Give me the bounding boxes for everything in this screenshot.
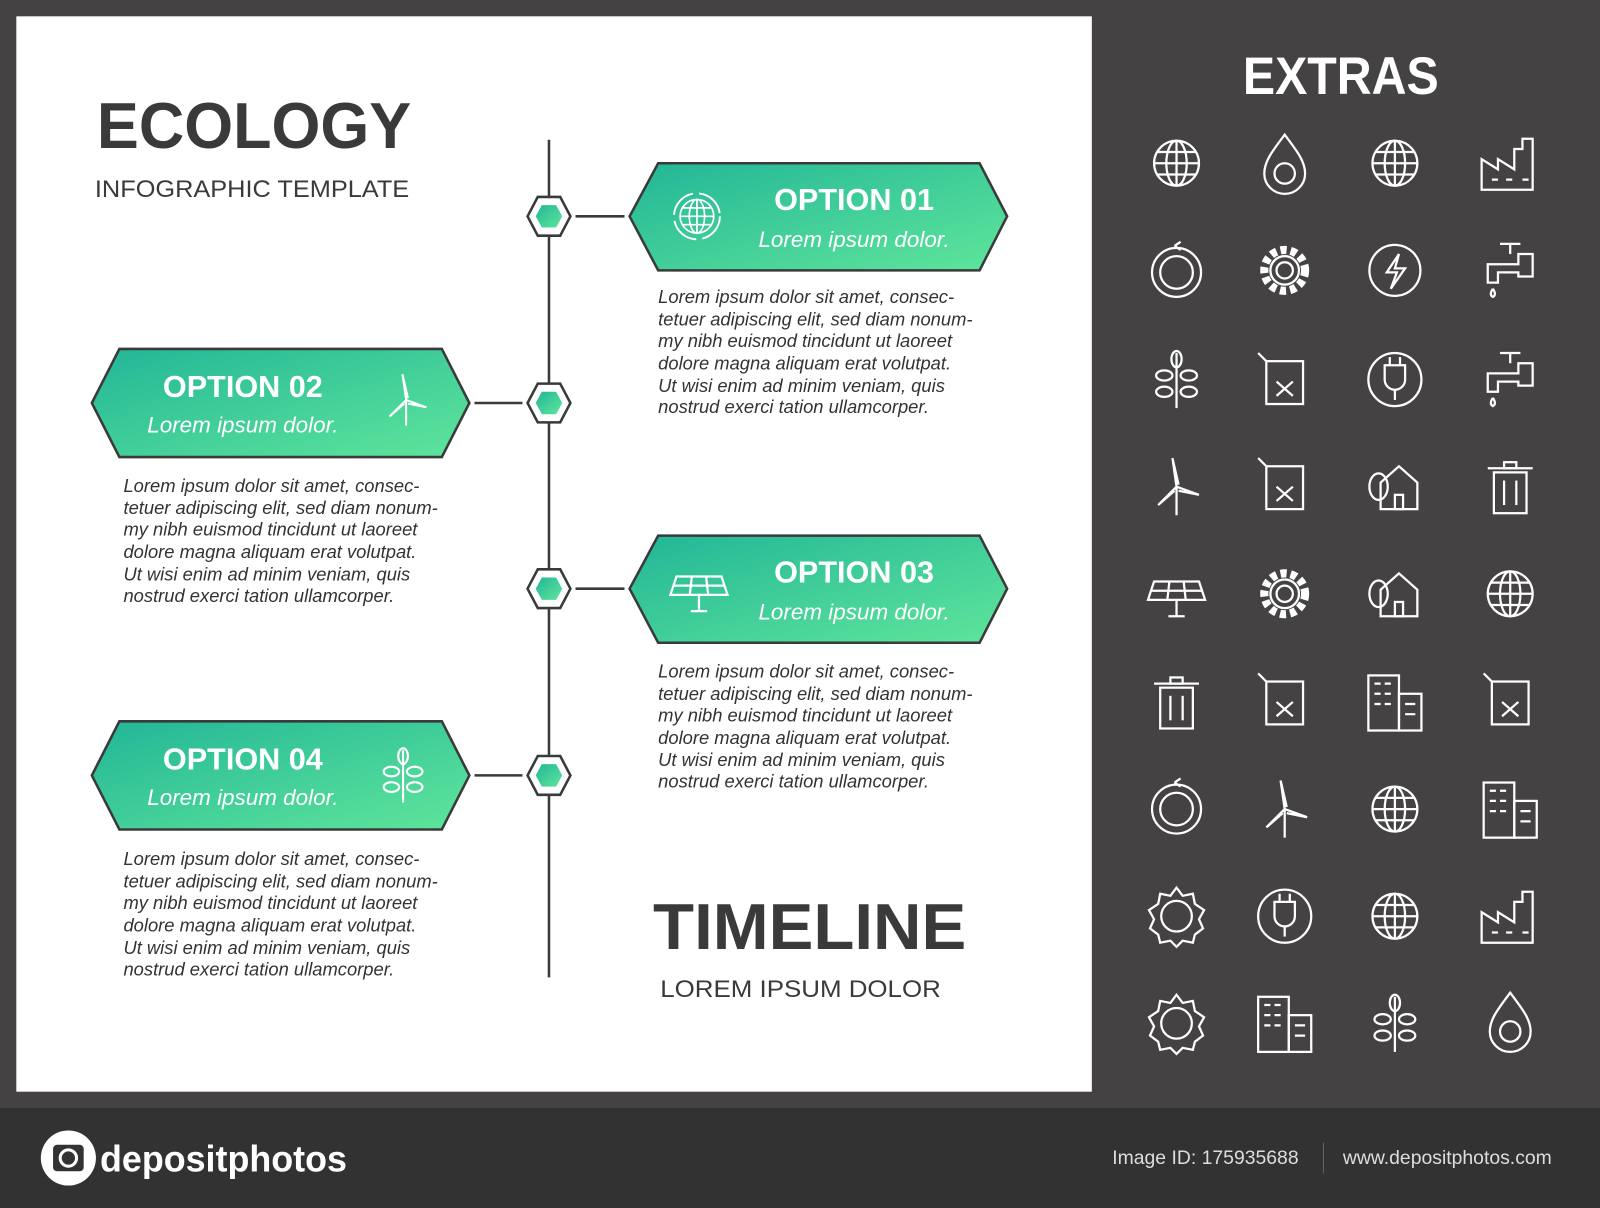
text: option 02 (123, 475, 438, 606)
timeline line (548, 140, 550, 977)
timeline heading (653, 890, 966, 1003)
text: option 02: Lorem ipsum dolor sit amet, consec- (123, 475, 419, 496)
text: option 04: nostrud exerci tation ullamcorper. (123, 958, 394, 979)
text: option 04: dolore magna aliquam erat volutpat. (123, 915, 416, 936)
option 04: Lorem ipsum dolor. (147, 785, 338, 810)
text: option 01: dolore magna aliquam erat volutpat. (658, 352, 951, 373)
footer bar (0, 1108, 1600, 1208)
white panel (16, 16, 1092, 1092)
text: option 01: Lorem ipsum dolor sit amet, consec- (658, 286, 954, 307)
title (95, 89, 411, 203)
extras icon grid (1148, 135, 1537, 1054)
text: option 04 (123, 848, 438, 979)
text: option 04: Lorem ipsum dolor sit amet, consec- (123, 848, 419, 869)
text: option 03: Lorem ipsum dolor sit amet, consec- (658, 660, 954, 681)
text: option 02: nostrud exerci tation ullamcorper. (123, 585, 394, 606)
text: option 02: Ut wisi enim ad minim veniam, quis (123, 564, 410, 585)
option 01: OPTION 01 (774, 183, 934, 217)
extras heading: EXTRAS (1243, 47, 1439, 106)
timeline heading: TIMELINE (653, 890, 966, 963)
footer logo (41, 1130, 347, 1186)
option 01: Lorem ipsum dolor. (758, 227, 950, 252)
option 02: Lorem ipsum dolor. (147, 413, 338, 438)
title: ECOLOGY (97, 89, 411, 162)
option 03 (630, 536, 1007, 643)
text: option 02: dolore magna aliquam erat volutpat. (123, 541, 416, 562)
option 01 (630, 163, 1007, 270)
text: option 03: my nibh euismod tincidunt ut laoreet (658, 704, 953, 725)
text: option 03: nostrud exerci tation ullamcorper. (658, 771, 929, 792)
text: option 01: nostrud exerci tation ullamcorper. (658, 396, 929, 417)
icon: globe (674, 193, 720, 239)
text: option 03: dolore magna aliquam erat volutpat. (658, 727, 951, 748)
icon: wind turbine (390, 374, 426, 426)
text: option 03 (658, 660, 973, 792)
icon: plant (384, 748, 422, 803)
text: option 01: my nibh euismod tincidunt ut laoreet (658, 330, 953, 351)
footer logo: depositphotos (100, 1138, 347, 1179)
text: option 02: tetuer adipiscing elit, sed diam nonum- (123, 497, 438, 518)
footer info: www.depositphotos.com (1342, 1147, 1552, 1169)
text: option 01 (658, 286, 973, 417)
text: option 04: tetuer adipiscing elit, sed diam nonum- (123, 871, 438, 892)
footer info: Image ID: 175935688 (1112, 1147, 1299, 1169)
text: option 04: my nibh euismod tincidunt ut laoreet (123, 892, 418, 913)
option 02 (92, 349, 469, 457)
title: INFOGRAPHIC TEMPLATE (95, 176, 409, 203)
text: option 01: tetuer adipiscing elit, sed diam nonum- (658, 308, 973, 329)
text: option 03: Ut wisi enim ad minim veniam, quis (658, 749, 945, 770)
timeline nodes (474, 197, 624, 795)
option 03: OPTION 03 (774, 556, 934, 590)
timeline heading: LOREM IPSUM DOLOR (660, 976, 941, 1003)
text: option 01: Ut wisi enim ad minim veniam, quis (658, 375, 945, 396)
option 04 (92, 721, 469, 829)
option 04: OPTION 04 (163, 742, 323, 776)
text: option 02: my nibh euismod tincidunt ut laoreet (123, 519, 418, 540)
icon: solar panel (670, 576, 728, 611)
option 03: Lorem ipsum dolor. (758, 599, 950, 624)
footer info (1112, 1143, 1552, 1173)
text: option 03: tetuer adipiscing elit, sed diam nonum- (658, 683, 973, 704)
text: option 04: Ut wisi enim ad minim veniam, quis (123, 937, 410, 958)
option 02: OPTION 02 (163, 370, 323, 404)
